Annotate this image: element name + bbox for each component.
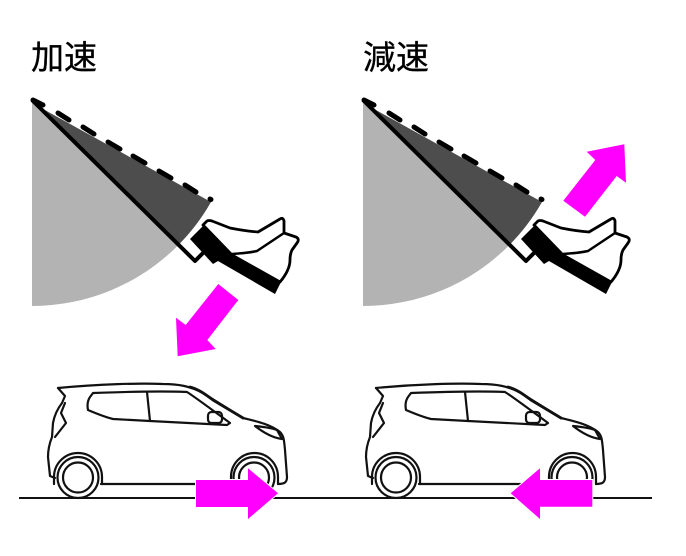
sill	[101, 483, 232, 485]
headlight	[573, 426, 600, 439]
heading: deceleration: 減速	[363, 39, 429, 76]
pedal arm	[363, 100, 535, 261]
ground line	[19, 497, 652, 499]
icon: foot on pedal	[521, 218, 629, 294]
car: acceleration	[48, 384, 287, 498]
arrow: car accelerating forward	[196, 468, 278, 519]
pedal diagram: deceleration	[363, 100, 629, 306]
pedal diagram: acceleration	[32, 100, 298, 306]
dark gray pedal travel sector	[374, 109, 542, 246]
dashed released position line	[33, 100, 211, 200]
side mirror	[208, 412, 222, 423]
tail light	[373, 403, 384, 437]
headlight	[255, 426, 282, 439]
car body outline	[58, 384, 287, 484]
dashed released position line	[364, 100, 542, 200]
side mirror	[526, 412, 540, 423]
sill	[419, 483, 550, 485]
front wheel	[231, 453, 278, 498]
pedal arm	[32, 100, 204, 261]
windows	[88, 392, 230, 425]
front wheel	[549, 453, 596, 498]
tail light	[55, 403, 66, 437]
heading: acceleration: 加速	[31, 39, 97, 76]
arrow: car decelerating backward	[511, 468, 592, 519]
light gray released pedal sector	[363, 100, 509, 306]
rear wheel	[54, 453, 102, 498]
rear wheel	[372, 453, 420, 498]
arrow: pedal pressed down	[176, 284, 238, 356]
car: deceleration	[366, 384, 605, 498]
dark gray pedal travel sector	[43, 109, 211, 246]
car body outline	[376, 384, 605, 484]
icon: foot on pedal	[190, 218, 298, 294]
arrow: pedal released up	[563, 144, 626, 217]
windows	[406, 392, 548, 425]
light gray released pedal sector	[32, 100, 178, 306]
